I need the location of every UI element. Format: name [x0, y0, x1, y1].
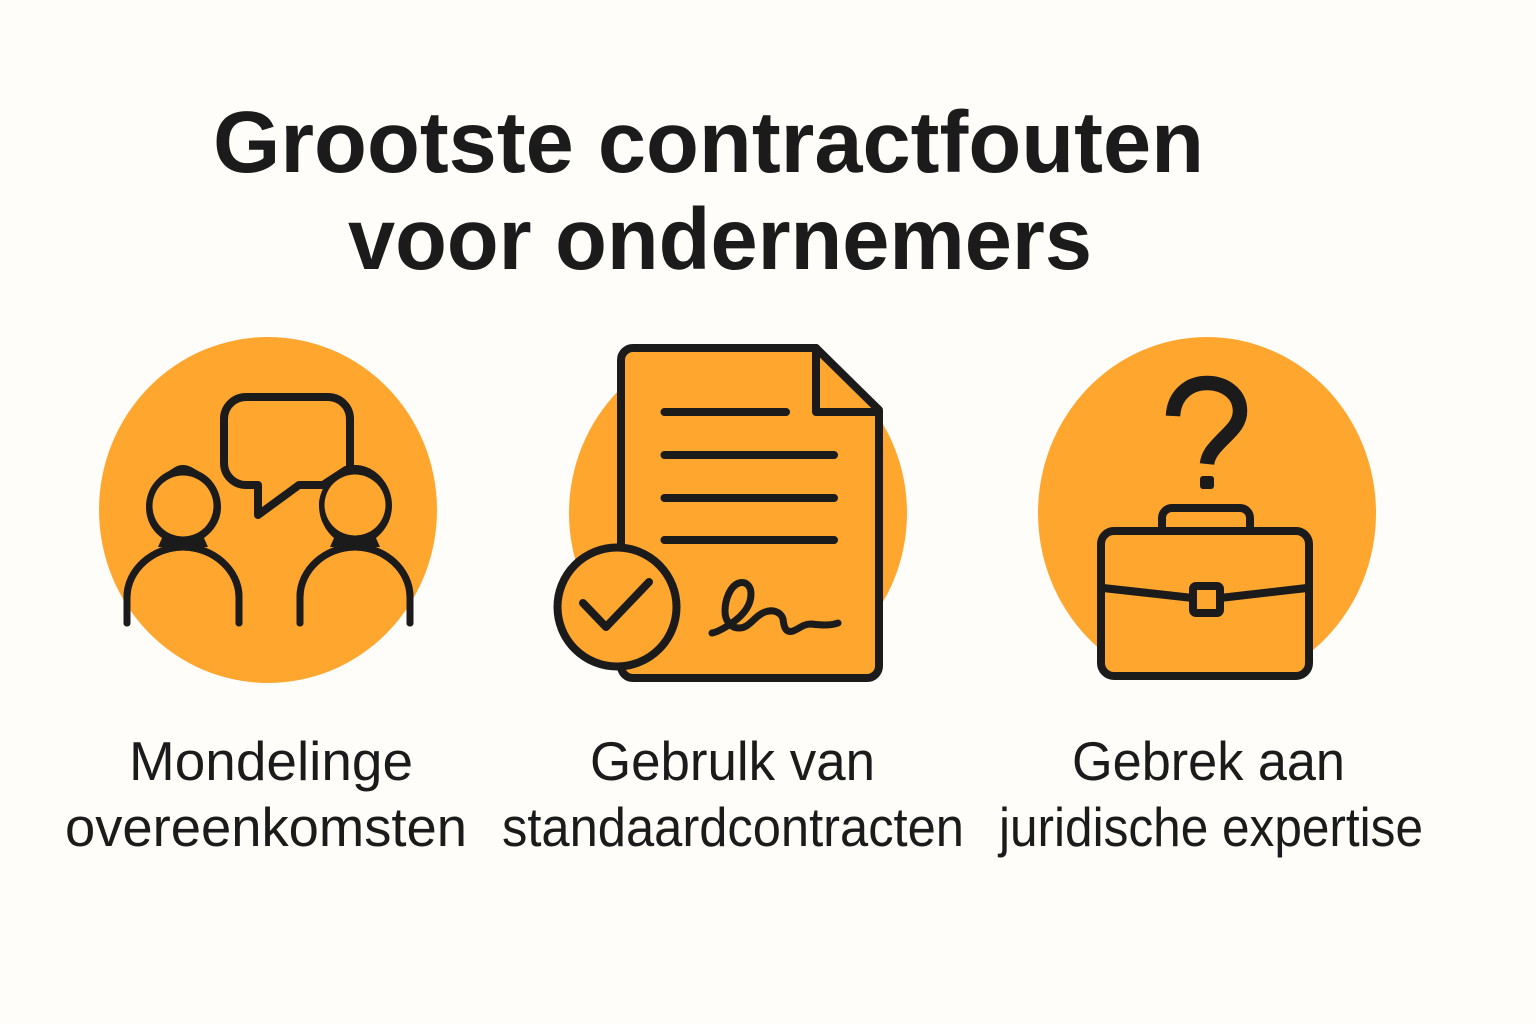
- label: gebrek aan juridische expertise: Gebrek aan: [1072, 730, 1345, 792]
- label: gebrek aan juridische expertise: [997, 730, 1423, 858]
- title: Grootste contractfouten: [213, 94, 1204, 191]
- label: mondelinge overeenkomsten: Mondelinge: [129, 730, 413, 792]
- panel: mondelinge overeenkomsten: [65, 337, 467, 858]
- icon: question mark: [1173, 383, 1240, 489]
- icon background circle: [569, 392, 907, 602]
- icon background circle: [99, 337, 437, 683]
- icon: briefcase: [1101, 508, 1309, 676]
- label: gebruik van standaardcontracten: standaardcontracten: [502, 796, 964, 858]
- panel: gebruik van standaardcontracten: [502, 340, 964, 858]
- icon: two people with speech bubble: [127, 397, 410, 623]
- panel: gebrek aan juridische expertise: [997, 337, 1423, 858]
- icon background circle: [1038, 337, 1376, 650]
- label: mondelinge overeenkomsten: overeenkomsten: [65, 796, 467, 858]
- icon: signed contract document with check mark: [558, 348, 879, 678]
- label: gebruik van standaardcontracten: Gebrulk van: [590, 730, 875, 792]
- label: gebrek aan juridische expertise: juridische expertise: [997, 796, 1423, 858]
- label: gebruik van standaardcontracten: [502, 730, 964, 858]
- title: voor ondernemers: [348, 191, 1092, 288]
- label: mondelinge overeenkomsten: [65, 730, 467, 858]
- title: [213, 94, 1204, 288]
